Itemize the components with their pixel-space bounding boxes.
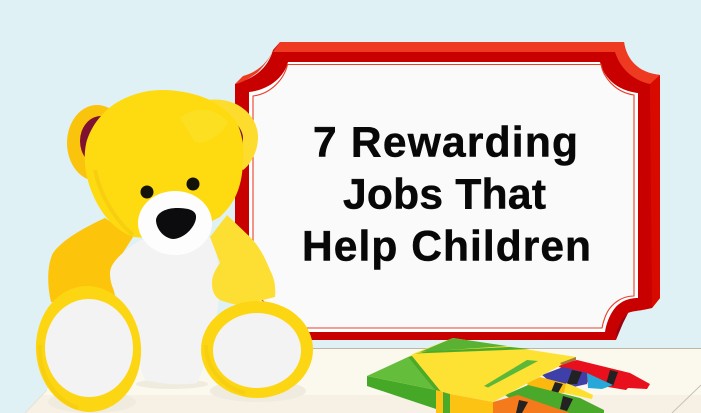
bear nose [156,208,196,239]
box lid [408,338,576,402]
table top [25,348,701,413]
box left side [367,376,436,409]
crayon: blue [542,367,613,390]
bear left ear [67,105,127,181]
crayon box [367,338,650,413]
head stitch shading [95,170,133,235]
bear body [110,237,219,384]
title: Help Children [302,224,591,270]
bear head [85,90,243,240]
title: Jobs That [343,172,546,218]
head highlight [180,110,228,143]
bear right arm [210,215,275,305]
lid stripes [415,347,530,354]
teddy bear [32,90,313,413]
bear right ear [207,100,258,170]
bear muzzle [138,191,212,255]
crayon: green [505,385,604,413]
sign panel [249,62,638,332]
bear right foot [201,301,313,398]
bear eyes [140,178,200,198]
crayon: orange [493,395,570,413]
shadows under the bear [48,379,306,413]
box front [436,390,443,413]
decorative frame: title sign [235,42,660,340]
title: 7 Rewarding [313,120,578,166]
bear left foot [32,282,145,413]
title [302,120,591,270]
crayon: yellow [527,377,593,399]
box inside edge [560,357,576,365]
crayon: red [556,360,650,390]
bear left arm [48,218,133,302]
